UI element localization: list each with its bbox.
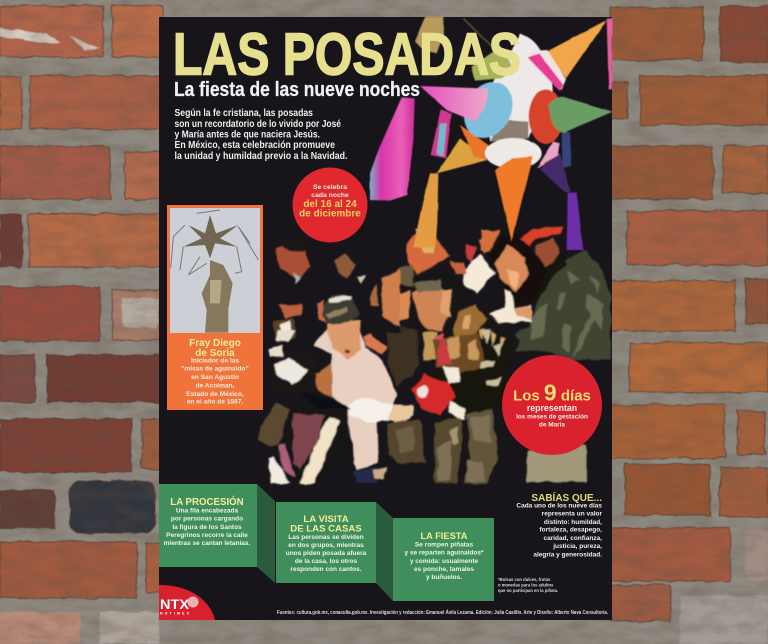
panel: Fray Diego de Soria: de Acolman,	[196, 382, 235, 390]
text: Sabías que: fortaleza, desapego,	[540, 526, 602, 534]
date circle: del 16 al 24	[303, 199, 357, 210]
lower spike yellow	[437, 138, 487, 173]
woman's lower body and red flower	[412, 328, 512, 420]
footnote: que no participan en la piñata.	[498, 588, 558, 593]
intro text: Según la fe cristiana, las posadas	[174, 107, 313, 119]
panel: La fiesta: y comida: usualmente	[410, 558, 479, 565]
panel: La fiesta	[393, 518, 494, 601]
panel: La Procesión: la figura de los Santos	[172, 524, 242, 531]
panel: La Procesión: mientras se cantan letanías.	[164, 540, 251, 547]
callout: Los 9 días: los meses de gestación	[516, 414, 588, 420]
blue pom	[455, 73, 522, 147]
panel: Fray Diego de Soria: Iniciador de las	[191, 358, 239, 364]
title: LAS POSADAS	[173, 22, 521, 88]
person: woman with dark hair and paper	[400, 228, 547, 323]
panel: Fray Diego de Soria: Estado de México,	[186, 391, 244, 398]
text: Sabías que: representa un valor	[542, 510, 602, 518]
panel: La Procesión: Una fila encabezada	[176, 508, 238, 514]
date circle	[292, 168, 368, 242]
date circle: Se celebra	[313, 184, 347, 191]
text: Sabías que: distinto: humildad,	[544, 519, 602, 526]
person: man at left	[273, 240, 400, 343]
fringe: blue strands	[562, 132, 571, 167]
panel: La visita de las casas: unos piden posada afuera	[286, 550, 367, 557]
fringe: top strands	[415, 17, 443, 53]
right streamer	[607, 18, 613, 89]
person: man in green jacket	[503, 227, 611, 360]
panel: La visita de las casas: DE LAS CASAS	[290, 524, 362, 534]
panel: La fiesta: es ponche, tamales	[414, 566, 474, 573]
body	[487, 34, 553, 142]
credits: Fuentes: cultura.gob.mx, conaculta.gob.mx. Investigación y redacción: Emanuel Ávila Lezama. Edición: Julia Castillo. Arte y Diseño: Alberto Nava Consultoría.	[277, 609, 608, 616]
pale trousers	[527, 445, 587, 482]
logo NTX Notimex: NOTIMEX	[160, 612, 190, 616]
date circle: de diciembre	[299, 208, 361, 220]
date circle: cada noche	[311, 192, 349, 199]
callout: Los 9 días	[502, 355, 602, 455]
intro text: la unidad y humildad previo a la Navidad.	[174, 150, 348, 162]
text: Sabías que: justicia, pureza,	[552, 543, 602, 550]
green spike	[548, 97, 613, 133]
person: child in pale coat	[313, 320, 413, 483]
orange cone	[495, 157, 533, 242]
intro text	[174, 107, 348, 162]
footnote	[498, 577, 558, 593]
panel: La visita de las casas: en dos grupos, mientras	[288, 542, 364, 549]
text: Sabías que: Cada uno de los nueve días	[516, 502, 602, 510]
panel: La Procesión	[159, 484, 257, 567]
person: woman with long hair	[398, 267, 520, 380]
fringe: orange streamer	[413, 173, 438, 247]
panel: La visita de las casas: de la casa, los otros	[295, 558, 357, 565]
callout: Los 9 días: Los 9 días	[513, 380, 591, 406]
panel: La fiesta: y buñuelos.	[426, 574, 462, 581]
callout: Los 9 días: representan	[527, 403, 577, 413]
text: Sabías que: caridad, confianza,	[543, 535, 602, 542]
3D step connectors	[257, 484, 393, 601]
text: Sabías que	[516, 491, 602, 558]
footnote: *Bolsas con dulces, frutas	[498, 577, 551, 582]
pink left spike	[420, 86, 488, 122]
orange spike top right	[547, 20, 607, 78]
callout: Los 9 días: de María	[539, 422, 565, 428]
panel: La fiesta: Se rompen piñatas	[415, 542, 473, 548]
olive spike	[472, 52, 513, 81]
panel: La visita de las casas: Las personas se dividen	[288, 534, 364, 541]
panel: Fray Diego de Soria: de Soria	[195, 348, 235, 359]
piñata	[370, 17, 613, 250]
logo NTX Notimex: NTX	[160, 596, 190, 612]
lower white ring	[485, 138, 542, 169]
footnote: o monedas para los adultos	[498, 582, 554, 588]
panel: La visita de las casas: responden con cantos.	[290, 566, 362, 573]
panel: La Procesión: por personas cargando	[171, 516, 243, 522]
fringe: purple	[539, 153, 571, 193]
panel: La Procesión: Peregrinos recorre la calle	[166, 532, 248, 539]
intro text: son un recordatorio de lo vivido por José	[174, 118, 341, 130]
hanging rope	[463, 18, 492, 47]
photo: monument with star	[170, 208, 260, 333]
panel: La visita de las casas: LA VISITA	[303, 514, 349, 525]
group of standing legs	[387, 330, 498, 483]
panel: La visita de las casas	[276, 502, 376, 583]
child's cap	[322, 295, 360, 325]
crowd illustration	[258, 227, 611, 484]
person: figure lower left in dark cape	[258, 330, 352, 484]
panel: La Procesión: LA PROCESIÓN	[170, 496, 244, 508]
text: Sabías que: SABÍAS QUE...	[531, 491, 602, 504]
red pom	[529, 89, 563, 144]
poster	[159, 17, 613, 620]
lower pink blob	[537, 142, 560, 168]
panel: Fray Diego de Soria: en el año de 1587.	[187, 398, 243, 406]
subtitle: La fiesta de las nueve noches	[174, 78, 420, 101]
panel: Fray Diego de Soria: Fray Diego	[189, 338, 241, 349]
fringe: mid streamer	[431, 109, 452, 158]
panel: Fray Diego de Soria: en San Agustín	[191, 374, 239, 381]
panel: Fray Diego de Soria	[167, 205, 263, 410]
panel: La fiesta: LA FIESTA	[420, 531, 468, 541]
pink band	[527, 50, 566, 89]
intro text: En México, esta celebración promueve	[174, 139, 335, 151]
fringe: big pink streamer	[370, 97, 415, 201]
panel: La fiesta: y se reparten aguinaldos*	[404, 550, 484, 556]
panel: Fray Diego de Soria: "misas de aguinaldo"	[181, 366, 249, 372]
intro text: y María antes de que naciera Jesús.	[174, 128, 320, 140]
logo NTX Notimex	[159, 585, 215, 620]
text: Sabías que: alegría y generosidad.	[533, 552, 602, 558]
